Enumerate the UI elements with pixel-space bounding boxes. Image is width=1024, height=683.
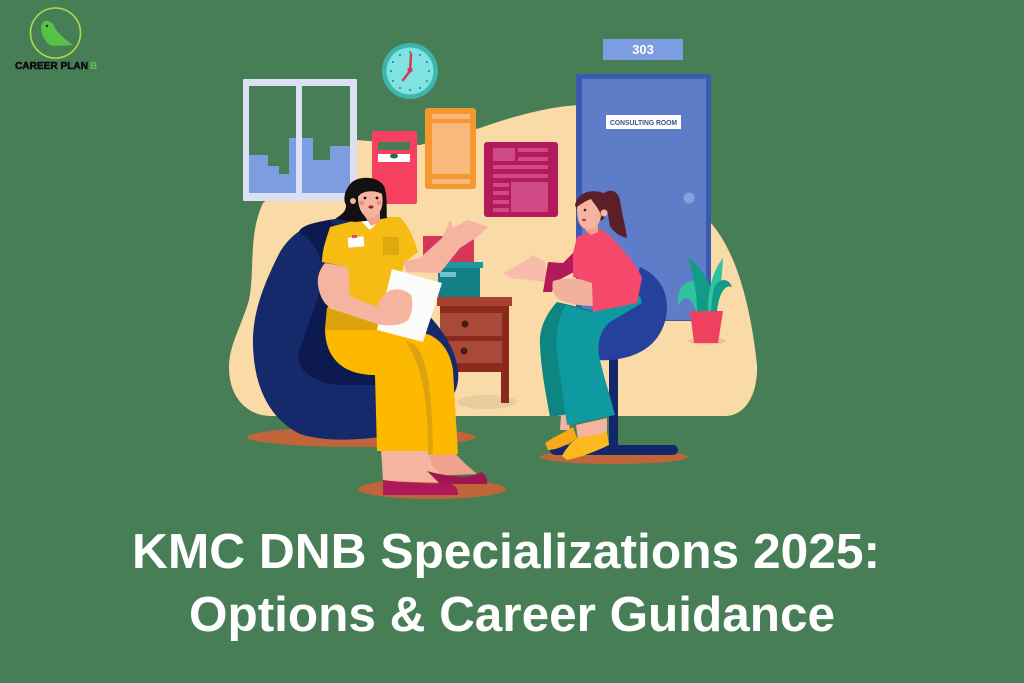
logo: Career Plan B: CAREER PLAN [15, 61, 88, 72]
nurse trousers [325, 320, 458, 455]
background blob [229, 105, 757, 416]
floor shadows [247, 427, 688, 499]
patient hands and cuff [503, 253, 594, 306]
patient head [575, 191, 627, 238]
nurse legs and shoes [381, 449, 487, 495]
logo: Career Plan B: B [90, 61, 97, 72]
potted plant [678, 257, 732, 344]
nurse figure [318, 178, 488, 495]
patient shoes [545, 427, 609, 460]
nurse head [335, 178, 387, 226]
nurse arm holding paper [318, 263, 412, 325]
patient sweater [573, 228, 642, 312]
side table with boxes [423, 236, 517, 409]
door [576, 74, 711, 321]
wall clock [382, 43, 438, 99]
bean bag chair [253, 219, 458, 440]
patient ankles [560, 415, 607, 440]
clipboard paper [377, 269, 442, 342]
red poster [372, 131, 417, 204]
window [243, 79, 357, 201]
room number sign [603, 39, 683, 60]
title [132, 525, 880, 642]
patient stool [550, 267, 678, 455]
logo: Career Plan B [15, 8, 97, 72]
nurse raised arm [403, 220, 488, 273]
title: KMC DNB Specializations 2025: [132, 525, 880, 579]
patient figure [503, 191, 642, 460]
room number sign: 303 [632, 42, 654, 57]
magenta poster [484, 142, 558, 217]
orange poster [425, 108, 476, 189]
nurse scrub top [322, 217, 418, 330]
consulting room sign: CONSULTING ROOM [610, 118, 677, 127]
consulting room sign [606, 115, 681, 129]
title: Options & Career Guidance [189, 588, 835, 642]
patient trousers [540, 296, 642, 425]
